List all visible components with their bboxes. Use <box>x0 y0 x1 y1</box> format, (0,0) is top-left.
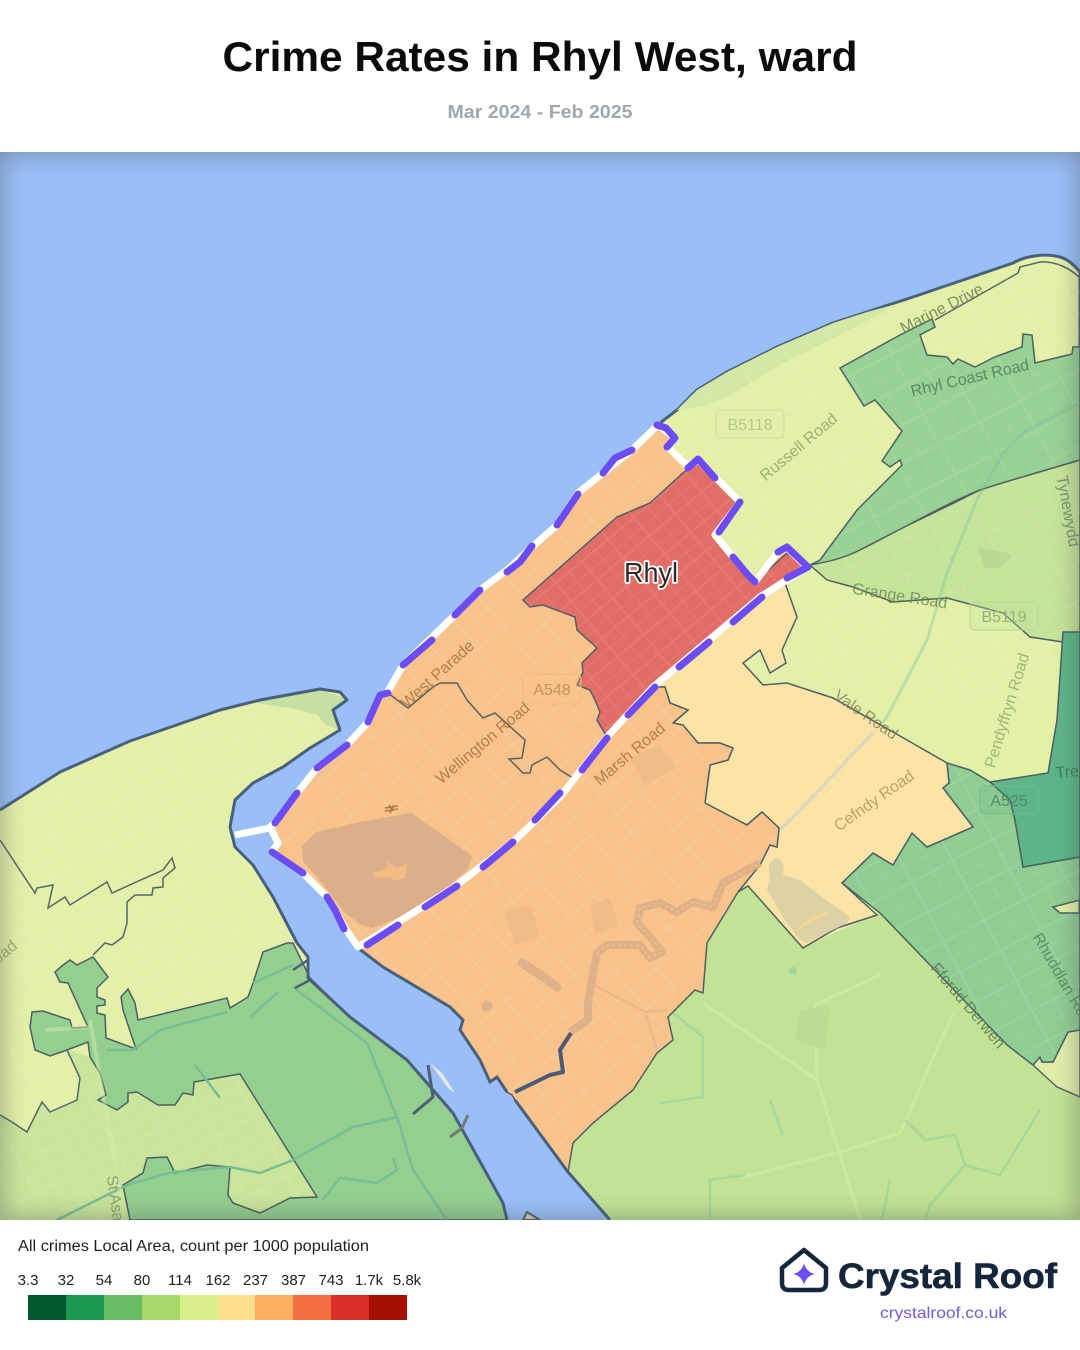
road shields: B5118 <box>727 417 773 434</box>
legend scale labels: 5.8k <box>393 1272 422 1289</box>
legend scale labels: 32 <box>58 1272 74 1289</box>
land: west of river <box>0 689 540 1220</box>
legend scale labels: 743 <box>318 1272 344 1289</box>
road labels: Pendyffryn Road <box>982 651 1033 770</box>
Marine Lake <box>305 816 469 925</box>
road labels: Marine Drive <box>898 281 986 337</box>
road labels: Rhyl Coast Road <box>909 357 1031 401</box>
legend scale labels: 387 <box>281 1272 306 1289</box>
road shields: B5119 <box>981 609 1027 626</box>
land: south light green zone <box>568 886 1080 1220</box>
road labels: West Parade <box>398 637 478 712</box>
ward: Rhyl central, red <box>523 461 807 737</box>
icon: house with star <box>782 1250 826 1290</box>
website: crystalroof.co.uk <box>880 1305 1008 1322</box>
legend scale labels: 54 <box>96 1272 112 1289</box>
legend scale labels: 237 <box>243 1272 268 1289</box>
panel: choropleth map <box>0 152 1080 1223</box>
wordmark: Crystal Roof <box>838 1257 1057 1296</box>
road labels: Marsh Road <box>591 720 669 789</box>
road labels: Russell Road <box>757 410 841 485</box>
legend scale labels <box>18 1272 422 1289</box>
ward outline: white casing <box>235 425 807 947</box>
ward: orange south <box>358 687 779 1172</box>
road labels: St Asa <box>103 1174 126 1223</box>
legend scale labels: 1.7k <box>355 1272 384 1289</box>
ward border west Rhyl <box>388 683 573 778</box>
stream: dark tidal channel <box>515 1033 571 1092</box>
land: light green ward east of Rhyl <box>810 460 1080 642</box>
stream: eastern watercourse <box>880 402 1080 725</box>
road labels: Vale Road <box>831 687 901 743</box>
road labels: Cefndy Road <box>831 768 918 835</box>
road labels: Grange Road <box>851 581 948 612</box>
legend scale labels: 162 <box>205 1272 231 1289</box>
ward: yellow Rhyl south <box>653 583 973 948</box>
legend scale labels: 114 <box>168 1272 192 1289</box>
road shields <box>523 410 1038 814</box>
icon: railway station <box>385 805 398 813</box>
legend scale labels: 80 <box>134 1272 150 1289</box>
road shields: A548 <box>533 682 571 699</box>
road labels: Ffordd Derwen <box>927 960 1008 1052</box>
legend <box>18 1238 422 1320</box>
legend scale labels: 3.3 <box>18 1272 38 1289</box>
road labels: Wellington Road <box>433 699 533 788</box>
place label: Rhyl: Rhyl <box>624 557 678 588</box>
title: Crime Rates in Rhyl West, ward <box>222 33 857 80</box>
ward outline: purple dashes <box>272 425 808 945</box>
subtitle: date range: Mar 2024 - Feb 2025 <box>448 101 632 122</box>
logo: Crystal Roof <box>782 1250 1057 1322</box>
road labels <box>0 281 1080 1223</box>
ward: dark green <box>990 632 1080 867</box>
legend title: All crimes Local Area, count per 1000 population <box>18 1238 369 1255</box>
ward: orange west Rhyl <box>270 425 807 947</box>
ward: south-east green <box>842 763 1080 1065</box>
sea and river <box>0 152 1080 1220</box>
road shields: A525 <box>990 793 1028 810</box>
map edge vignette <box>0 152 1080 1220</box>
legend colour bar <box>28 1295 407 1320</box>
ward: north-east green <box>810 319 1080 565</box>
land: north-east yellow-green zone <box>659 254 1080 943</box>
road labels: Tre <box>1055 763 1080 782</box>
river bank east <box>358 948 610 1220</box>
